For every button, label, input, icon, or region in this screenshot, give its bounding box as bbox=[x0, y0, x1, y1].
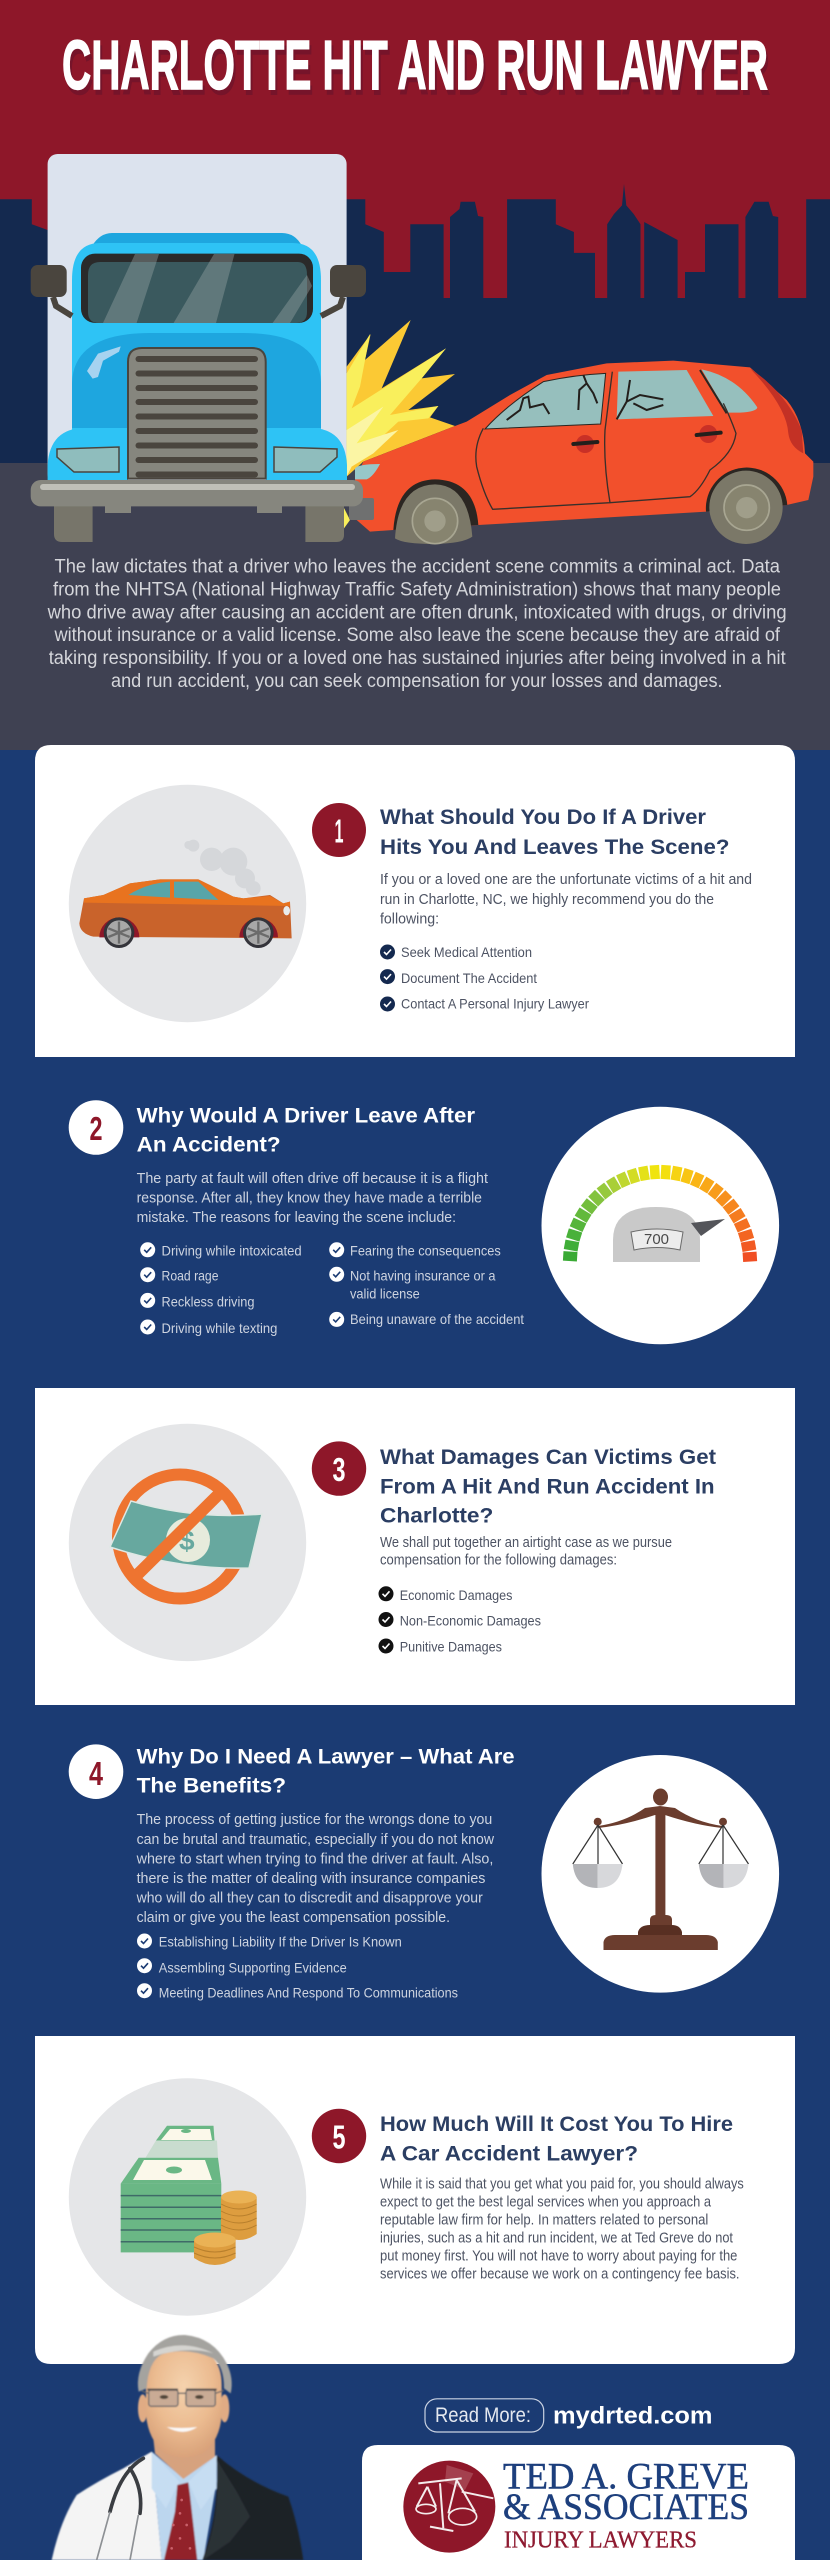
body text 3: compensation for the following damages: bbox=[380, 1552, 617, 1568]
number badge 4: 4 bbox=[89, 1755, 103, 1792]
read more link: mydrted.com bbox=[553, 2403, 712, 2430]
checklist 3: Non-Economic Damages bbox=[400, 1612, 541, 1628]
heading 3: From A Hit And Run Accident In bbox=[380, 1474, 715, 1498]
intro paragraph: from the NHTSA (National Highway Traffic Safety Administration) shows that many people bbox=[53, 580, 781, 601]
intro paragraph: who drive away after causing an accident are often drunk, intoxicated with drugs, or driving bbox=[47, 603, 787, 624]
intro paragraph: taking responsibility. If you or a loved one has sustained injuries after being involved in a hit bbox=[49, 648, 786, 669]
header background with skyline bbox=[0, 0, 830, 750]
body text 5: services we offer because we work on a contingency fee basis. bbox=[380, 2266, 740, 2282]
body text 4: claim or give you the least compensation possible. bbox=[137, 1910, 450, 1926]
checklist 2: Reckless driving bbox=[162, 1294, 254, 1310]
heading 1: Hits You And Leaves The Scene? bbox=[380, 835, 730, 859]
read more link: Read More: bbox=[435, 2404, 531, 2427]
checklist 2: Road rage bbox=[162, 1268, 219, 1284]
read more link bbox=[425, 2399, 712, 2432]
logo card bbox=[362, 2445, 795, 2560]
heading 5 bbox=[380, 2112, 733, 2166]
checklist 4 bbox=[137, 1934, 458, 2001]
body text 4: The process of getting justice for the wrongs done to you bbox=[137, 1812, 492, 1828]
body text 4: who will do all they can to discredit and disapprove your bbox=[136, 1891, 483, 1907]
icon: prohibited money: $ bbox=[179, 1525, 195, 1556]
illustration: explosion bbox=[343, 320, 455, 528]
body text 2: The party at fault will often drive off because it is a flight bbox=[137, 1171, 488, 1187]
panel: section 2 bbox=[69, 1100, 779, 1344]
heading 3: Charlotte? bbox=[380, 1504, 493, 1528]
number badge 1 bbox=[312, 803, 366, 857]
checklist 1: Contact A Personal Injury Lawyer bbox=[401, 996, 589, 1012]
checklist 3: Economic Damages bbox=[400, 1587, 512, 1603]
number badge 2 bbox=[69, 1100, 123, 1155]
icon: credit score gauge: 700 bbox=[644, 1231, 669, 1248]
heading 4: The Benefits? bbox=[137, 1773, 286, 1797]
panel: section 3 bbox=[35, 1388, 795, 1705]
illustration: truck box bbox=[48, 154, 347, 484]
number badge 5 bbox=[312, 2109, 366, 2163]
body text 2: mistake. The reasons for leaving the scene include: bbox=[137, 1210, 456, 1226]
body text 4 bbox=[136, 1812, 495, 1926]
body text 5: While it is said that you get what you paid for, you should always bbox=[380, 2177, 744, 2193]
icon: prohibited money bbox=[110, 1474, 262, 1598]
body text 4: where to start when trying to find the driver at fault. Also, bbox=[136, 1852, 493, 1868]
body text 2 bbox=[137, 1171, 488, 1226]
number badge 5: 5 bbox=[332, 2118, 346, 2156]
icon: smoking orange car bbox=[79, 840, 292, 948]
body text 1: following: bbox=[380, 912, 439, 928]
checklist 4: Assembling Supporting Evidence bbox=[159, 1959, 347, 1975]
number badge 3: 3 bbox=[332, 1451, 346, 1488]
panel: section 5 bbox=[35, 2036, 795, 2364]
blue lower background bbox=[0, 750, 830, 2560]
logo: firm name: INJURY LAWYERS bbox=[504, 2527, 697, 2553]
checklist 2: Being unaware of the accident bbox=[350, 1311, 524, 1327]
checklist 2: Driving while texting bbox=[162, 1320, 277, 1336]
body text 1: If you or a loved one are the unfortunate victims of a hit and bbox=[380, 872, 752, 888]
illustration: crashed red car bbox=[355, 361, 813, 544]
heading 4: Why Do I Need A Lawyer – What Are bbox=[137, 1744, 515, 1768]
icon: scales of justice bbox=[573, 1788, 748, 1950]
checklist 2: Driving while intoxicated bbox=[162, 1243, 302, 1259]
portrait: lawyer bbox=[52, 2335, 303, 2560]
heading 5: A Car Accident Lawyer? bbox=[380, 2142, 638, 2166]
body text 1: run in Charlotte, NC, we highly recommend you do the bbox=[380, 892, 714, 908]
body text 4: can be brutal and traumatic, especially if you do not know bbox=[137, 1832, 495, 1848]
heading 5: How Much Will It Cost You To Hire bbox=[380, 2112, 733, 2136]
body text 4: there is the matter of dealing with insurance companies bbox=[137, 1871, 485, 1887]
heading 3: What Damages Can Victims Get bbox=[380, 1445, 716, 1469]
checklist 1 bbox=[380, 944, 589, 1012]
body text 5: put money first. You will not have to worry about paying for the bbox=[380, 2248, 737, 2264]
checklist 1: Document The Accident bbox=[401, 970, 537, 986]
number badge 1: 1 bbox=[334, 813, 344, 850]
checklist 4: Meeting Deadlines And Respond To Communications bbox=[159, 1985, 458, 2001]
body text 5: injuries, such as a hit and run incident, we at Ted Greve do not bbox=[380, 2230, 733, 2246]
logo: scales emblem bbox=[403, 2461, 495, 2553]
heading 2 bbox=[137, 1104, 476, 1157]
icon: money stack and coins bbox=[121, 2126, 257, 2265]
heading 3 bbox=[380, 1445, 716, 1528]
checklist 2: valid license bbox=[350, 1285, 420, 1301]
number badge 3 bbox=[312, 1441, 366, 1496]
body text 3 bbox=[380, 1535, 672, 1568]
body text 3: We shall put together an airtight case as we pursue bbox=[380, 1535, 672, 1551]
checklist 2 bbox=[140, 1242, 524, 1336]
logo: firm name: & ASSOCIATES bbox=[503, 2487, 749, 2528]
checklist 1: Seek Medical Attention bbox=[401, 944, 532, 960]
heading 1 bbox=[380, 805, 730, 859]
body text 5 bbox=[380, 2177, 744, 2282]
intro paragraph: The law dictates that a driver who leaves the accident scene commits a criminal act. Data bbox=[54, 557, 780, 578]
heading 2: An Accident? bbox=[137, 1133, 281, 1157]
intro paragraph bbox=[47, 557, 787, 692]
intro paragraph: without insurance or a valid license. Some also leave the scene because they are afraid of bbox=[54, 625, 781, 646]
heading 2: Why Would A Driver Leave After bbox=[137, 1104, 476, 1128]
logo: firm name bbox=[503, 2456, 749, 2553]
number badge 4 bbox=[69, 1744, 123, 1799]
checklist 2: Fearing the consequences bbox=[350, 1243, 501, 1259]
checklist 3 bbox=[378, 1586, 541, 1654]
logo: firm name: TED A. GREVE bbox=[503, 2456, 749, 2497]
intro paragraph: and run accident, you can seek compensation for your losses and damages. bbox=[111, 671, 723, 692]
body text 5: reputable law firm for help. In matters related to personal bbox=[380, 2212, 708, 2228]
heading 1: What Should You Do If A Driver bbox=[380, 805, 707, 829]
body text 2: response. After all, they know they have made a terrible bbox=[137, 1190, 482, 1206]
heading 4 bbox=[137, 1744, 515, 1797]
checklist 4: Establishing Liability If the Driver Is Known bbox=[159, 1934, 402, 1950]
body text 5: expect to get the best legal services when you approach a bbox=[380, 2195, 712, 2211]
number badge 2: 2 bbox=[90, 1110, 102, 1147]
checklist 2: Not having insurance or a bbox=[350, 1268, 496, 1284]
checklist 3: Punitive Damages bbox=[400, 1638, 502, 1654]
illustration: blue truck cab bbox=[31, 233, 374, 542]
body text 1 bbox=[380, 872, 752, 928]
icon: credit score gauge bbox=[563, 1165, 757, 1262]
panel: section 1 bbox=[35, 745, 795, 1057]
panel: section 4 bbox=[69, 1744, 779, 2001]
